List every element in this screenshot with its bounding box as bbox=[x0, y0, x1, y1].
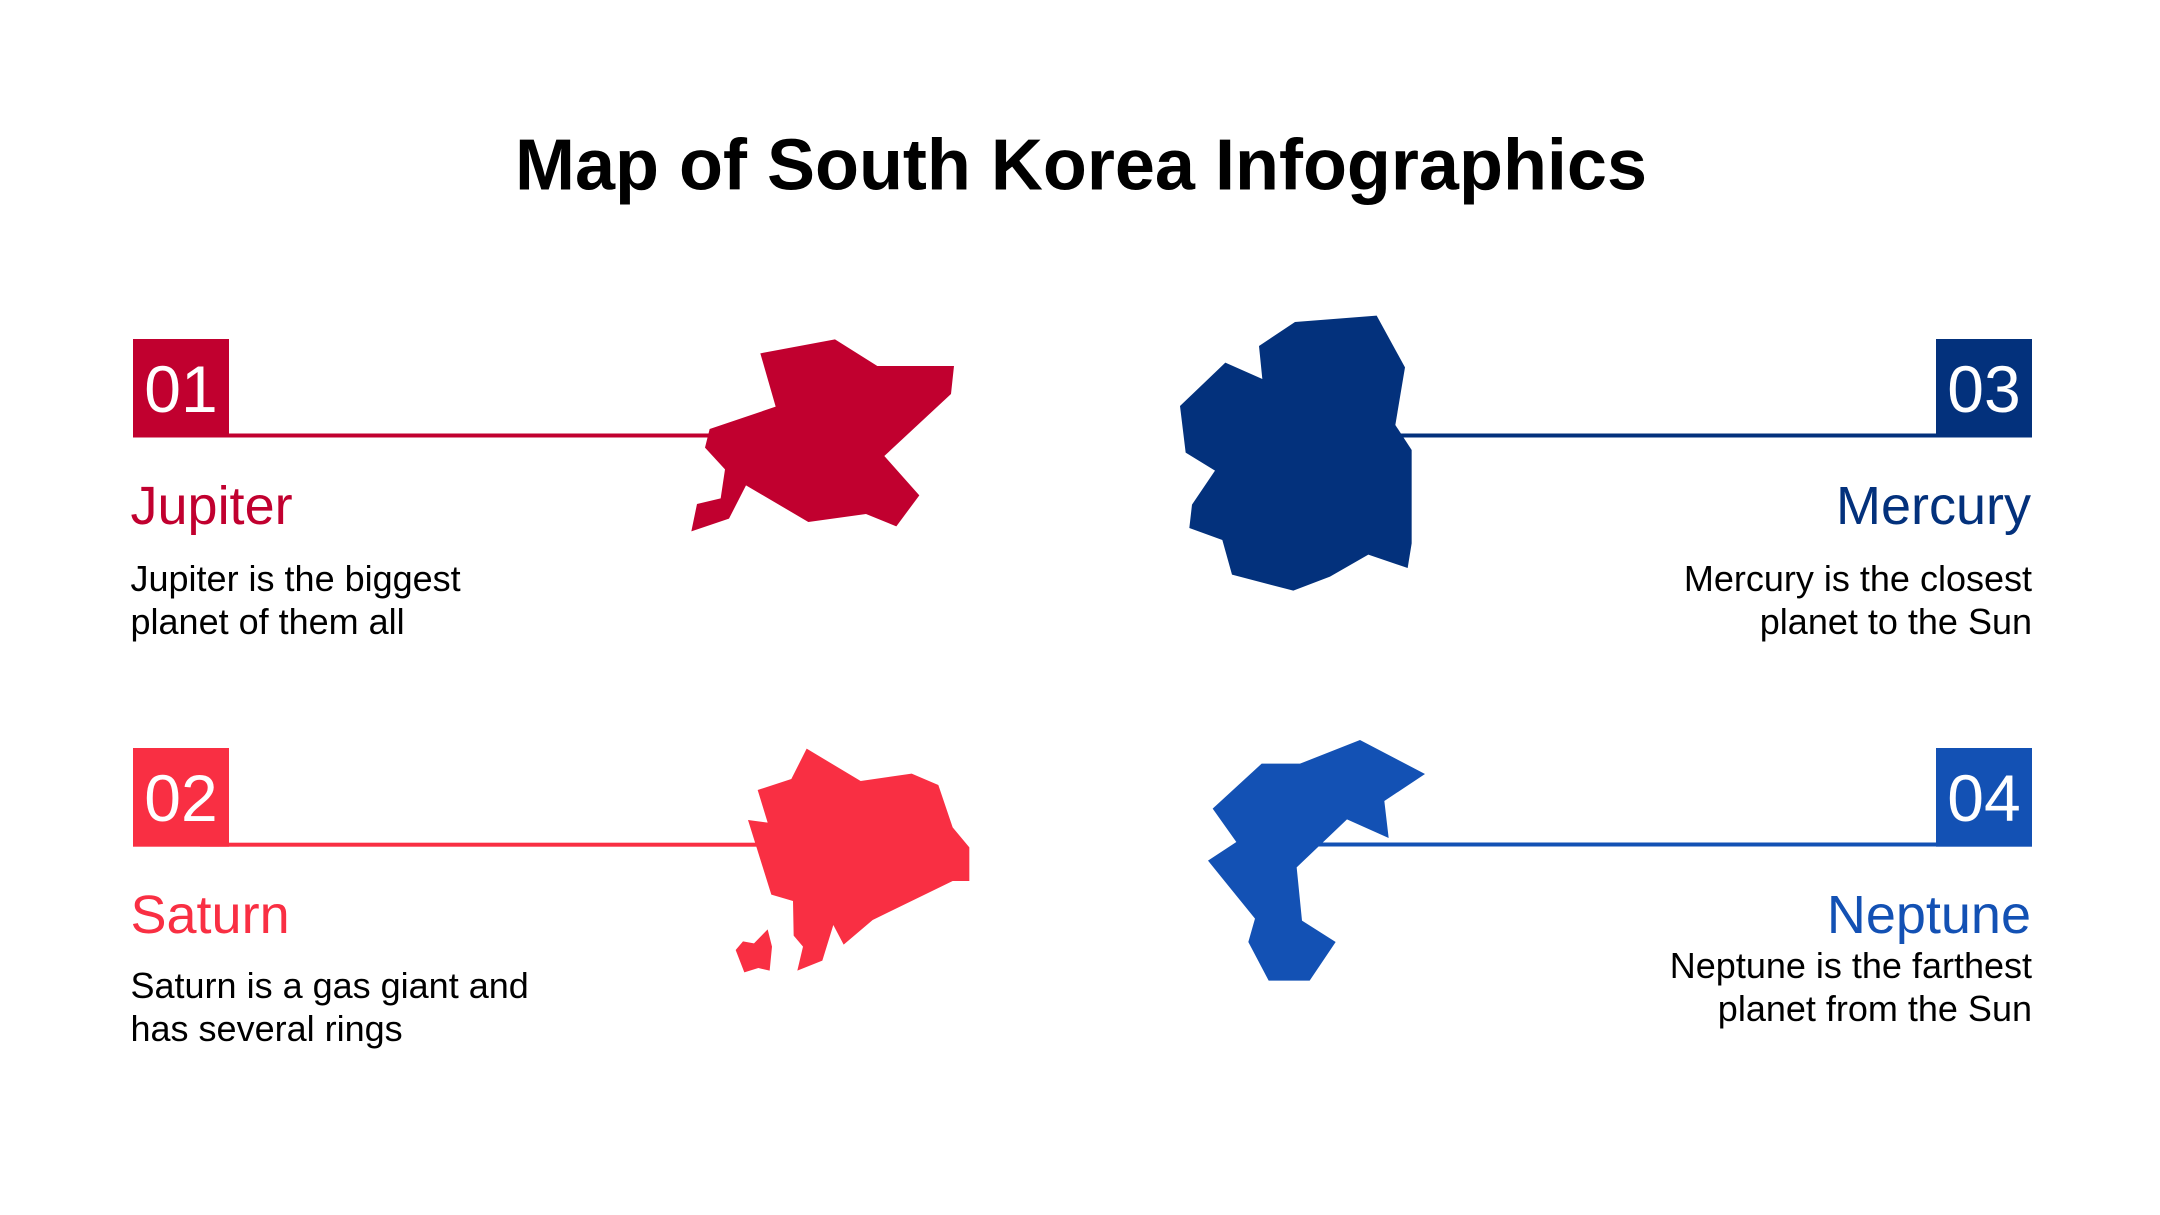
map: Mercury region bbox=[1180, 316, 1412, 591]
number box 03 bbox=[1936, 339, 2032, 438]
number box 01 bbox=[133, 339, 229, 438]
map: Saturn region bbox=[736, 749, 969, 972]
connector line 02 bbox=[200, 843, 760, 847]
description: Neptune: planet from the Sun bbox=[1718, 988, 2032, 1029]
connector line 03 bbox=[1400, 434, 2000, 438]
number box 04: 04 bbox=[1947, 761, 2021, 835]
number box 04 bbox=[1936, 748, 2032, 847]
panel: Mercury bbox=[1180, 316, 2032, 642]
panel: Jupiter bbox=[130, 339, 954, 642]
number box 02 bbox=[133, 748, 229, 847]
connector line 01 bbox=[200, 434, 714, 438]
connector line 04 bbox=[1316, 842, 1956, 846]
number box 02: 02 bbox=[144, 761, 218, 835]
heading: Saturn: Saturn bbox=[130, 885, 290, 945]
description: Saturn: Saturn is a gas giant and bbox=[130, 965, 529, 1006]
map: Jupiter region bbox=[691, 339, 954, 531]
description: Jupiter: planet of them all bbox=[130, 601, 405, 642]
map: Neptune region bbox=[1208, 740, 1425, 981]
heading: Mercury: Mercury bbox=[1836, 476, 2031, 536]
description: Mercury: Mercury is the closest bbox=[1684, 558, 2032, 599]
number box 01: 01 bbox=[144, 352, 218, 426]
title: Map of South Korea Infographics bbox=[515, 126, 1647, 206]
description: Mercury: planet to the Sun bbox=[1760, 601, 2032, 642]
panel: Saturn bbox=[130, 748, 969, 1049]
number box 03: 03 bbox=[1947, 352, 2021, 426]
panel: Neptune bbox=[1208, 740, 2032, 1029]
description: Jupiter: Jupiter is the biggest bbox=[130, 558, 461, 599]
description: Neptune: Neptune is the farthest bbox=[1670, 945, 2032, 986]
heading: Jupiter: Jupiter bbox=[130, 476, 293, 536]
heading: Neptune: Neptune bbox=[1827, 885, 2031, 945]
description: Saturn: has several rings bbox=[130, 1008, 403, 1049]
